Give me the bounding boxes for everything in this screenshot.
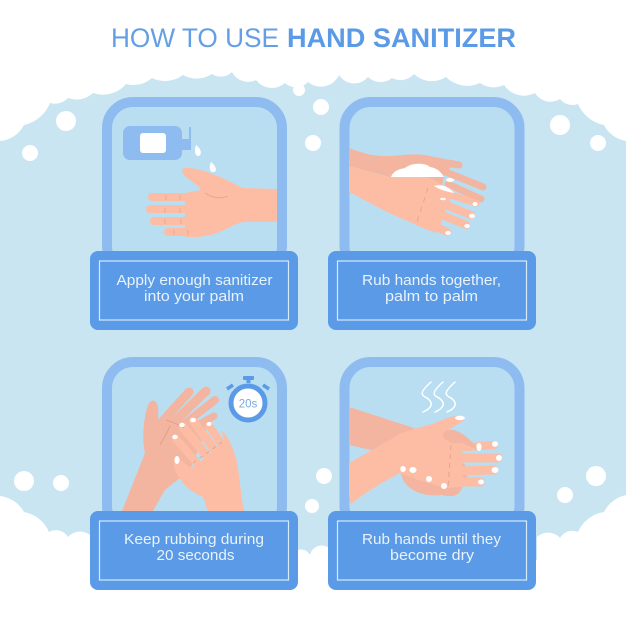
back hand and arm — [349, 407, 470, 496]
step 2 caption box: palm to palm — [385, 289, 478, 305]
icon: sanitizer drops — [195, 145, 216, 172]
step 1 caption box: Apply enough sanitizer — [116, 273, 273, 289]
background foam cloud — [0, 72, 626, 560]
back hand — [349, 148, 483, 199]
step 3 caption box: Keep rubbing during — [124, 532, 264, 548]
step 1 caption box — [90, 251, 298, 330]
step 3 caption box — [90, 511, 298, 590]
front hand — [349, 166, 476, 233]
step 2 caption box — [328, 251, 536, 330]
title: HAND SANITIZER — [287, 23, 516, 53]
step 4 illustration: drying hands — [349, 407, 502, 506]
front hand and arm — [349, 416, 498, 506]
step 3 illustration: rubbing hands — [122, 391, 244, 511]
hand crease lines — [417, 188, 428, 222]
hand crease lines — [165, 193, 228, 235]
back palm above fingers — [443, 430, 478, 450]
icon: sanitizer bottle — [123, 126, 191, 160]
step 4 frame — [344, 362, 520, 532]
fingertip foam — [172, 418, 212, 464]
step 4 caption box: become dry — [390, 548, 475, 564]
step 2 illustration: hands palm to palm — [349, 148, 483, 235]
step 2 caption box: Rub hands together, — [362, 273, 501, 289]
step 1 frame — [107, 102, 282, 272]
fingernails and foam — [400, 416, 502, 489]
back hand — [122, 391, 215, 511]
step 3 caption box: 20 seconds — [156, 548, 234, 564]
title — [111, 23, 516, 53]
soap bubbles — [14, 84, 606, 513]
hand crease line — [448, 445, 451, 488]
panel: step 2 rub palms — [328, 102, 536, 330]
step 1 illustration: bottle and hand — [123, 126, 277, 237]
finger gaps and crease lines — [193, 442, 222, 463]
hand palm up — [150, 168, 277, 237]
step 1 caption box: into your palm — [144, 289, 244, 305]
step 4 caption box: Rub hands until they — [362, 532, 502, 548]
step 3 frame — [107, 362, 282, 532]
panel: step 4 rub until dry — [328, 362, 536, 590]
front hand — [174, 422, 244, 511]
panel: step 3 keep rubbing — [90, 362, 298, 590]
title: HOW TO USE — [111, 23, 279, 53]
icon: heat waves — [422, 382, 455, 412]
foam and fingertips — [391, 164, 478, 235]
panel: step 1 apply sanitizer — [90, 102, 298, 330]
icon: stopwatch 20s — [227, 376, 269, 420]
step 2 frame — [344, 102, 520, 272]
icon: stopwatch 20s: 20s — [239, 398, 258, 410]
step 4 caption box — [328, 511, 536, 590]
